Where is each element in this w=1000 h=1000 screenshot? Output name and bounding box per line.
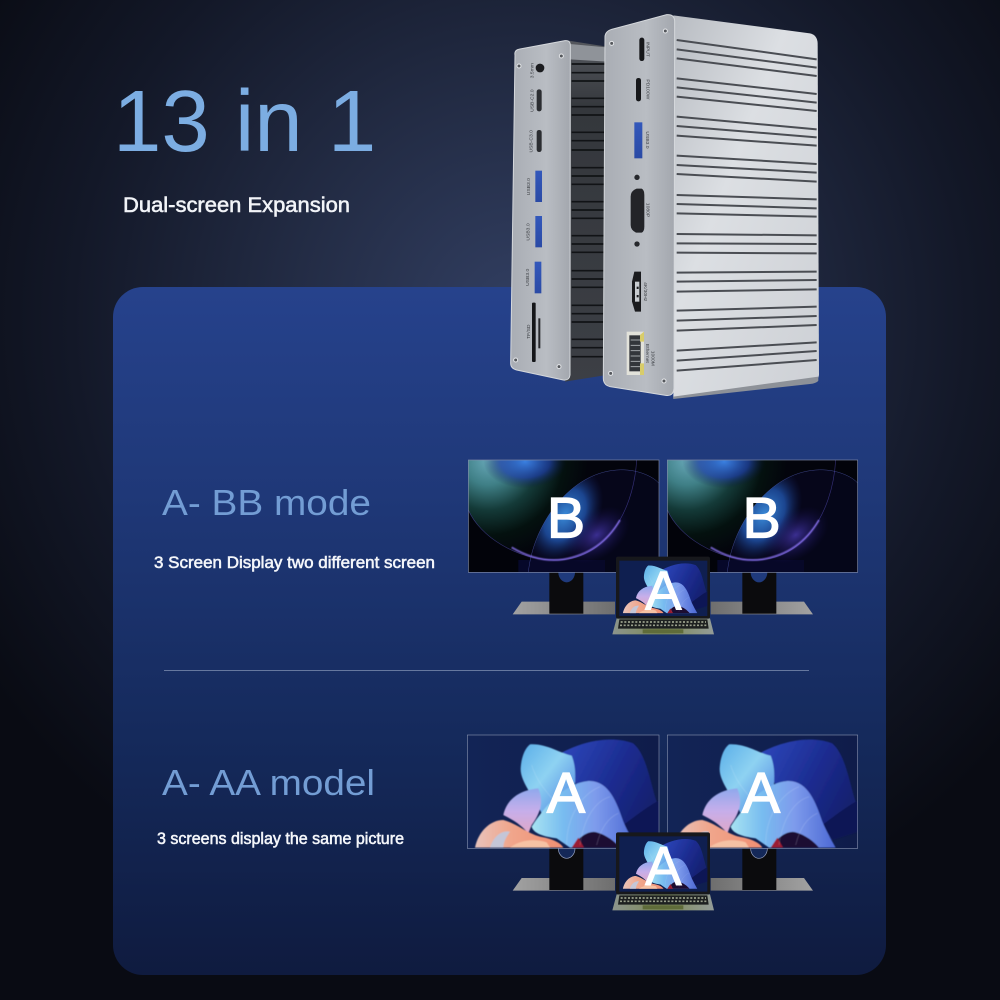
product: docking station, two views	[511, 15, 819, 399]
right hub	[603, 15, 819, 399]
port labels: right hub: USB3.0	[644, 131, 650, 149]
title: 13 in 1	[113, 73, 376, 170]
port labels: left hub: USB3.0	[525, 223, 531, 241]
subtitle: Dual-screen Expansion	[123, 194, 350, 217]
port labels: left hub: USB3.0	[525, 269, 531, 286]
caption: BB mode: 3 Screen Display two different screen	[154, 554, 435, 572]
port labels: right hub: 4K/30Hz	[642, 282, 648, 302]
caption: AA model: 3 screens display the same picture	[157, 830, 404, 848]
heat sink grooves	[677, 40, 817, 371]
right monitor stand	[711, 572, 813, 614]
laptop A	[612, 557, 714, 634]
port labels: left hub: USB-C2.0	[529, 89, 535, 112]
divider	[164, 670, 809, 671]
left monitor A	[467, 735, 660, 848]
port labels: right hub: Ethernet	[644, 344, 650, 363]
port labels: left hub: USB-C3.0	[529, 130, 535, 153]
panel: modes	[113, 287, 886, 975]
port labels: right hub: 1080P	[645, 203, 651, 218]
right monitor B: B	[743, 486, 781, 550]
laptop A: A	[645, 559, 682, 621]
port labels: left hub: 3.5mm	[529, 63, 535, 78]
left monitor B: B	[547, 486, 585, 550]
port labels: left hub: TF/SD	[526, 324, 532, 339]
left monitor B	[468, 435, 659, 575]
left monitor stand	[513, 848, 615, 891]
port labels: left hub: USB3.0	[526, 178, 532, 195]
port labels: right hub: 1000M	[649, 351, 655, 366]
heading: BB mode: A- BB mode	[162, 482, 371, 523]
port labels: left hub	[525, 63, 535, 339]
right monitor A	[667, 735, 859, 848]
right monitor A: A	[742, 761, 781, 825]
illustration: BB mode monitors and laptop	[468, 460, 858, 634]
laptop A: A	[645, 835, 682, 897]
illustration: AA model monitors and laptop	[467, 735, 859, 910]
left monitor stand	[513, 572, 615, 614]
port labels: right hub: INPUT	[645, 42, 651, 57]
ports: right hub	[609, 29, 667, 383]
right monitor stand	[711, 848, 813, 891]
heading: AA model: A- AA model	[162, 762, 375, 803]
left monitor A: A	[547, 761, 586, 825]
right monitor B	[667, 435, 858, 575]
laptop A	[612, 832, 714, 910]
port labels: right hub	[642, 42, 655, 366]
ports: left hub	[514, 54, 563, 369]
port labels: right hub: PD100W	[645, 79, 651, 100]
left hub	[511, 41, 607, 382]
